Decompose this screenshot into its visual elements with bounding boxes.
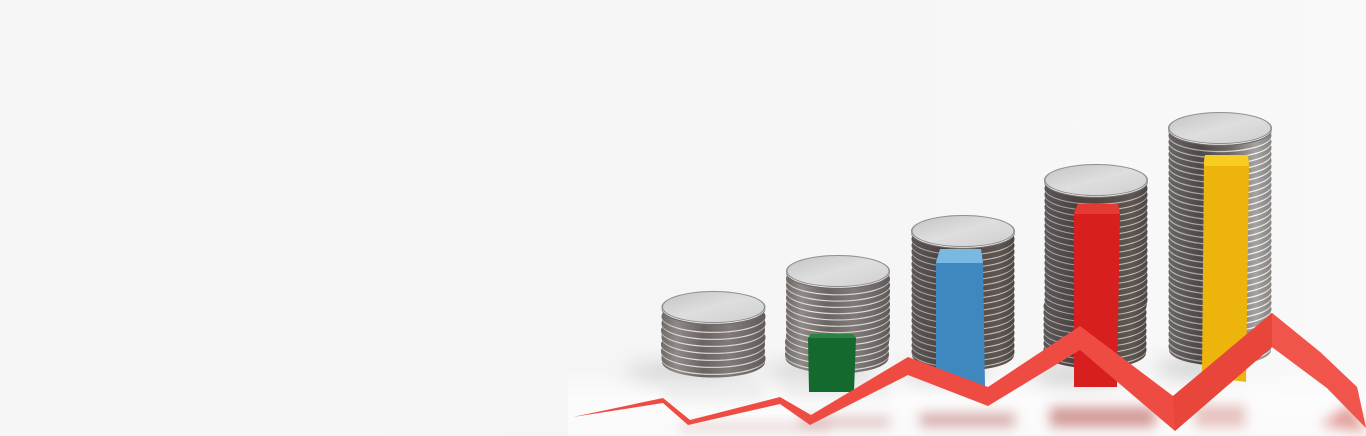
coin stack 1 (661, 291, 766, 378)
coin stack 2 (785, 255, 890, 374)
floor shadows and reflections (625, 359, 1366, 432)
coin stack 5 (1168, 112, 1272, 366)
reflective floor (568, 370, 1366, 436)
yellow block (1202, 155, 1249, 382)
green block (808, 334, 856, 392)
coin stack 3 (911, 215, 1015, 370)
red paper line chart (573, 313, 1366, 431)
coin stack 4 (1044, 164, 1148, 368)
blue block (936, 249, 985, 386)
red block (1074, 204, 1120, 387)
